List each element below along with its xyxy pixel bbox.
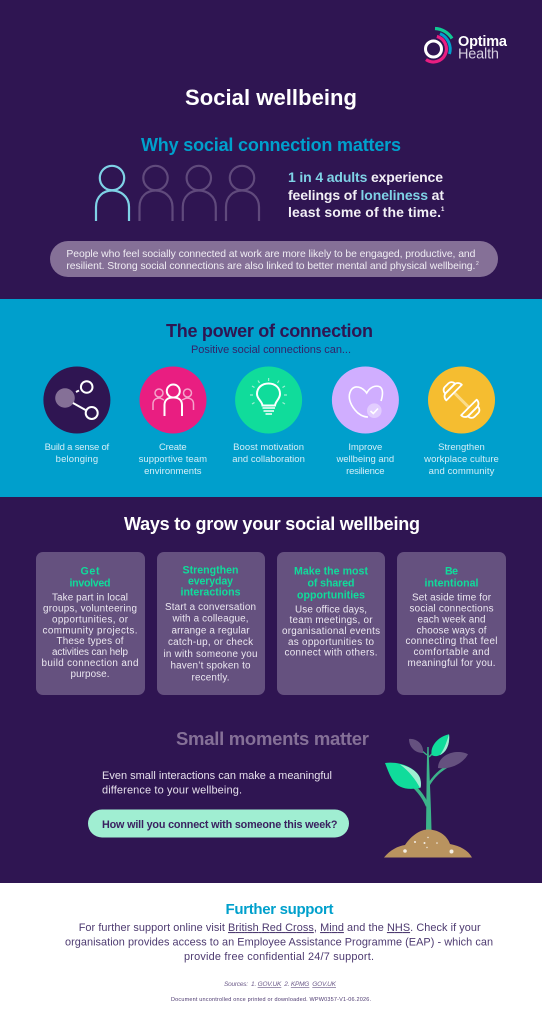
icon: dumbbell	[428, 366, 495, 434]
card: get involved: groups, volunteering	[43, 604, 137, 614]
heading: ways to grow: Ways to grow your social wellbeing	[124, 514, 420, 534]
label: team environments: supportive team	[139, 454, 207, 465]
card: strengthen everyday interactions: arrange a regular	[172, 626, 250, 636]
icon: light bulb	[235, 366, 302, 434]
heading: small moments matter: Small moments matter	[176, 728, 369, 749]
callout: how will you connect: How will you connect with someone this week?	[102, 819, 338, 831]
subheading: Positive social connections can...	[191, 344, 351, 356]
card: strengthen everyday interactions	[157, 552, 265, 695]
leaf: purple right	[438, 752, 468, 768]
card: be intentional: Be	[445, 566, 458, 578]
callout: how will you connect	[88, 810, 349, 838]
statistic: 1 in 4 adults	[288, 169, 445, 220]
text: small interactions: difference to your wellbeing.	[102, 784, 242, 796]
logo: Optima Health: Optima	[458, 34, 508, 50]
label: resilience: wellbeing and	[335, 454, 394, 465]
card: strengthen everyday interactions: Start a conversation	[165, 602, 256, 613]
card: strengthen everyday interactions: everyday	[188, 576, 233, 588]
label: resilience	[335, 442, 394, 477]
card: get involved	[36, 552, 145, 695]
label: motivation: and collaboration	[232, 454, 305, 465]
leaf: large left	[385, 763, 421, 789]
heading: further support: Further support	[226, 901, 334, 918]
callout: connected at work: 2	[476, 261, 479, 267]
label: team environments: environments	[144, 466, 202, 477]
label: workplace culture: workplace culture	[423, 454, 499, 465]
label: workplace culture	[423, 442, 499, 477]
card: get involved: community projects.	[42, 626, 138, 636]
text: support details: organisation provides access to an Employee Assistance Programme (EAP) - which can	[65, 936, 493, 948]
text: support details	[65, 922, 493, 963]
label: belonging: Build a sense of	[45, 442, 110, 453]
statistic: 1 in 4 adults: 1	[441, 207, 445, 213]
icon: share nodes	[43, 366, 110, 434]
label: team environments: Create	[159, 442, 187, 453]
logo: Optima Health: Health	[458, 46, 499, 62]
label: team environments	[139, 442, 207, 477]
card: get involved: purpose.	[70, 669, 110, 680]
callout: connected at work	[50, 241, 498, 277]
text: small interactions	[102, 770, 332, 796]
label: belonging	[45, 442, 110, 465]
text: support details: For further support online visit British Red Cross, Mind and the NHS. Check if your	[79, 922, 481, 934]
soil	[384, 830, 472, 858]
card: get involved: activities can help	[52, 647, 128, 658]
card: be intentional: intentional	[424, 578, 479, 590]
leaf: purple left	[409, 739, 423, 753]
label: resilience: resilience	[346, 466, 384, 477]
logo: Optima Health	[426, 28, 508, 62]
label: motivation	[232, 442, 305, 465]
card: be intentional: meaningful for you.	[408, 658, 496, 669]
icon: team of people	[140, 366, 206, 434]
card: make the most of shared opportunities: of shared	[308, 578, 354, 590]
leaf: top right	[431, 734, 449, 756]
label: resilience: Improve	[348, 442, 382, 453]
card: be intentional: comfortable and	[414, 647, 490, 658]
sources: Sources: 1. GOV.UK 2. KPMG GOV.UK	[224, 981, 337, 988]
card: make the most of shared opportunities: connect with others.	[284, 648, 378, 658]
card: get involved: Take part in local	[52, 592, 128, 604]
card: make the most of shared opportunities: organisational events	[282, 626, 380, 637]
card: make the most of shared opportunities: opportunities	[297, 590, 365, 602]
statistic: 1 in 4 adults: feelings of loneliness at	[288, 187, 444, 203]
card: be intentional	[397, 552, 506, 695]
card: make the most of shared opportunities: team meetings, or	[290, 615, 373, 626]
card: make the most of shared opportunities: Use office days,	[295, 604, 367, 616]
icon: growing plant	[384, 734, 472, 858]
card: strengthen everyday interactions: in with someone you	[164, 649, 258, 660]
label: workplace culture: and community	[429, 466, 495, 477]
statistic: 1 in 4 adults: 1 in 4 adults experience	[288, 169, 443, 185]
card: make the most of shared opportunities: Make the most	[294, 566, 368, 578]
heading: the power of connection: The power of connection	[166, 321, 373, 341]
card: be intentional: Set aside time for	[412, 592, 492, 604]
card: strengthen everyday interactions: Strengthen	[182, 564, 238, 576]
panel: the power of connection	[0, 299, 542, 497]
statistic: 1 in 4 adults: least some of the time.	[288, 204, 441, 220]
card: be intentional: connecting that feel	[406, 636, 498, 647]
text: support details: provide free confidential 24/7 support.	[184, 951, 374, 963]
text: small interactions: Even small interactions can make a meaningful	[102, 770, 332, 782]
card: strengthen everyday interactions: with a colleague,	[172, 614, 248, 624]
icon: four people, one highlighted	[96, 166, 259, 221]
title: Social wellbeing	[185, 85, 357, 110]
document note: Document uncontrolled once printed or downloaded. WPW0357-V1-06.2026.	[171, 997, 371, 1003]
panel: further support	[0, 883, 542, 1024]
card: get involved: These types of	[56, 636, 124, 647]
card: get involved: build connection and	[42, 658, 138, 669]
card: strengthen everyday interactions: interactions	[180, 586, 241, 598]
heading: why social connection matters: Why social connection matters	[141, 135, 401, 155]
card: strengthen everyday interactions: catch-up, or check	[168, 637, 253, 648]
card: be intentional: each week and	[418, 614, 486, 626]
callout: connected at work: resilient. Strong social connections are also linked to better mental and physical wellbeing.	[66, 261, 475, 272]
card: strengthen everyday interactions: haven’t spoken to	[170, 660, 251, 672]
label: motivation: Boost motivation	[233, 442, 304, 453]
card: make the most of shared opportunities	[277, 552, 385, 695]
callout: connected at work: People who feel socially connected at work are more likely to be engaged, productive, and	[66, 249, 476, 260]
label: belonging: belonging	[56, 454, 98, 465]
card: strengthen everyday interactions: recently.	[192, 672, 230, 684]
card: make the most of shared opportunities: as opportunities to	[288, 637, 374, 648]
card: be intentional: choose ways of	[416, 626, 487, 636]
card: be intentional: social connections	[410, 604, 494, 614]
card: get involved: opportunities, or	[52, 614, 129, 626]
label: workplace culture: Strengthen	[438, 442, 485, 453]
card: get involved: involved	[70, 578, 110, 590]
icon: heart with check	[332, 366, 399, 434]
card: get involved: Get	[80, 566, 100, 578]
